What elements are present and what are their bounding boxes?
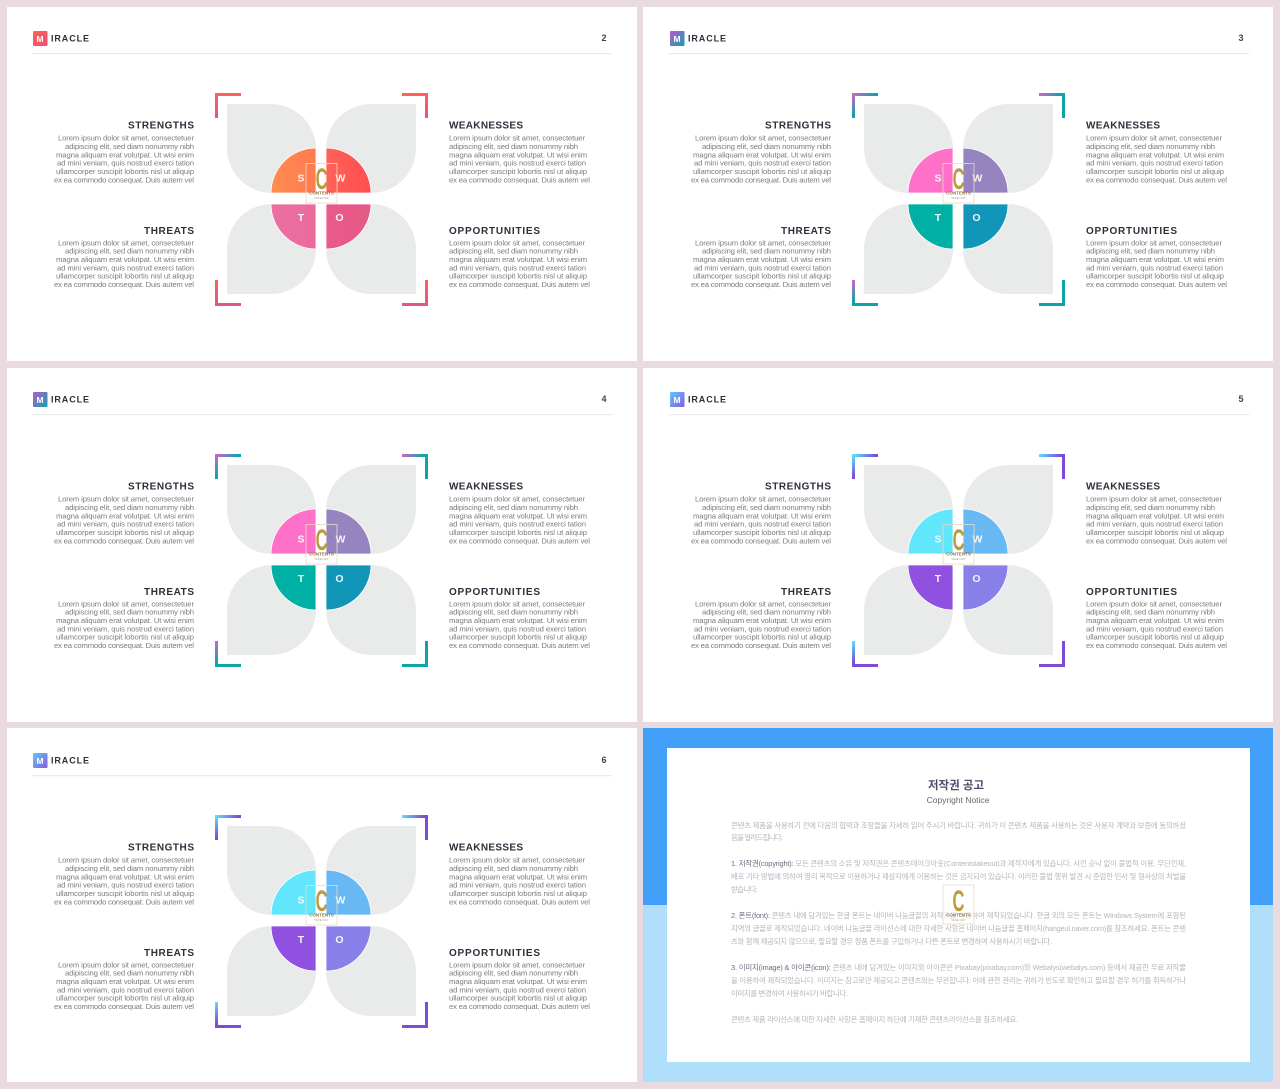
text block: opportunities: ullamcorper suscipit lobortis nisl ut aliquip [449, 994, 587, 1003]
text block: weaknesses: ullamcorper suscipit lobortis nisl ut aliquip [449, 889, 587, 898]
text block: threats: ullamcorper suscipit lobortis nisl ut aliquip [56, 994, 194, 1003]
text block: opportunities: ex ea commodo consequat. Duis autem vel [1086, 641, 1227, 650]
text block: strengths: ex ea commodo consequat. Duis autem vel [54, 175, 194, 184]
text block: weaknesses: WEAKNESSES [1086, 482, 1160, 492]
text block: strengths: magna aliquam erat volutpat. Ut wisi enim [693, 511, 831, 520]
text block: weaknesses: ex ea commodo consequat. Duis autem vel [449, 175, 590, 184]
text block: weaknesses: Lorem ipsum dolor sit amet, consectetuer [449, 494, 585, 504]
text block: weaknesses: magna aliquam erat volutpat. Ut wisi enim [449, 872, 587, 881]
text block: threats: ad mini veniam, quis nostrud exerci tation [694, 263, 831, 272]
logo: miracle [33, 753, 89, 768]
text block: weaknesses: magna aliquam erat volutpat. Ut wisi enim [449, 150, 587, 159]
text block: strengths: Lorem ipsum dolor sit amet, consectetuer [695, 134, 831, 142]
logo: miracle: IRACLE [688, 34, 726, 44]
logo: miracle: M [36, 395, 44, 405]
text block: opportunities: Lorem ipsum dolor sit amet, consectetuer [1086, 599, 1222, 608]
logo: miracle [33, 31, 89, 46]
text block: strengths: ad mini veniam, quis nostrud exerci tation [57, 159, 194, 168]
text block: weaknesses [449, 120, 590, 184]
text block: opportunities: magna aliquam erat volutpat. Ut wisi enim [1086, 255, 1224, 264]
text block: threats: Lorem ipsum dolor sit amet, consectetuer [58, 599, 194, 608]
text block: opportunities: adipiscing elit, sed diam nonummy nibh [449, 969, 578, 978]
diagram: swot flower: S [297, 894, 305, 906]
text block: opportunities: Lorem ipsum dolor sit amet, consectetuer [449, 960, 585, 969]
diagram: swot flower: O [972, 212, 981, 224]
logo: miracle: IRACLE [51, 756, 89, 766]
text block: threats: THREATS [144, 587, 194, 598]
text block: strengths: ullamcorper suscipit lobortis nisl ut aliquip [56, 167, 194, 176]
text block: threats: adipiscing elit, sed diam nonummy nibh [65, 969, 194, 978]
text block: opportunities: ad mini veniam, quis nostrud exerci tation [449, 624, 586, 633]
text block: weaknesses [1086, 482, 1227, 545]
heading: copyright title: 저작권 공고 [928, 778, 984, 792]
text block: opportunities: ullamcorper suscipit lobortis nisl ut aliquip [449, 272, 587, 281]
text block: threats: adipiscing elit, sed diam nonummy nibh [65, 247, 194, 256]
text block: strengths: adipiscing elit, sed diam nonummy nibh [65, 142, 194, 151]
text block: clause 2 font: 지역의 글꼴로 제작되었습니다. 네이버 나눔글꼴 라이선스에 대한 자세한 사항은 네이버 나눔글꼴 홈페이지(hangeul.naver.com)를 참조하세요. 폰트는 콘텐 [731, 924, 1186, 933]
text block: closing note: 콘텐츠 제품 라이선스에 대한 자세한 사항은 홈페이지 하단에 기재한 콘텐츠라이선스를 참조하세요. [731, 1015, 1018, 1024]
text block: strengths: magna aliquam erat volutpat. Ut wisi enim [56, 150, 194, 159]
text block: opportunities: Lorem ipsum dolor sit amet, consectetuer [449, 238, 585, 247]
logo: miracle [670, 392, 726, 407]
logo: miracle: IRACLE [51, 34, 89, 44]
text block: threats: ex ea commodo consequat. Duis autem vel [691, 641, 831, 650]
diagram: swot flower: S [297, 172, 305, 184]
text block: threats: ad mini veniam, quis nostrud exerci tation [57, 263, 194, 272]
diagram: swot flower: S [297, 534, 305, 546]
text block: weaknesses: magna aliquam erat volutpat. Ut wisi enim [1086, 511, 1224, 520]
text block: opportunities: ullamcorper suscipit lobortis nisl ut aliquip [449, 633, 587, 642]
text block: strengths: ullamcorper suscipit lobortis nisl ut aliquip [56, 528, 194, 537]
text block: weaknesses: Lorem ipsum dolor sit amet, consectetuer [1086, 494, 1222, 504]
page number: 3 [1238, 33, 1244, 43]
watermark: CONTENTS [309, 552, 334, 556]
watermark: TAKE OUT [951, 918, 966, 922]
text block: strengths: ex ea commodo consequat. Duis autem vel [54, 897, 194, 906]
text block: clause 2 font: 2. 폰트(font): 콘텐츠 내에 담겨있는 한글 폰트는 네이버 나눔글꼴의 저작권을 이용하여 제작되었습니다. 한글 외의 모든 폰트는 Windows System에 포함된 [731, 911, 1186, 920]
logo: miracle: IRACLE [51, 394, 89, 404]
page number: 4 [601, 394, 607, 404]
text block: clause 3 image and icon: 을 이용하여 제작되었습니다. 이미지는 참고로만 제공되고 콘텐츠와는 무관합니다. 이에 관한 관리는 귀하가 빈도로 확인하고 필요할 경우 허가를 취득하거나 [731, 976, 1186, 985]
panel: copyright notice [643, 728, 1273, 1082]
text block: threats: THREATS [781, 587, 831, 598]
text block: threats: ad mini veniam, quis nostrud exerci tation [57, 624, 194, 633]
heading: copyright title [927, 778, 990, 805]
text block: opportunities [1086, 587, 1227, 650]
text block: strengths: ex ea commodo consequat. Duis autem vel [54, 536, 194, 545]
text block: clause 1 copyright: 배포 기타 방법에 의하여 영리 목적으로 이용하거나 제삼자에게 이용하는 것은 금지되어 있습니다. 이러한 불법 행위 발견 시 준엄한 민사 및 형사상의 처벌을 [731, 872, 1186, 881]
text block: threats: magna aliquam erat volutpat. Ut wisi enim [693, 255, 831, 264]
text block: threats: magna aliquam erat volutpat. Ut wisi enim [56, 977, 194, 986]
text block: threats: ullamcorper suscipit lobortis nisl ut aliquip [56, 272, 194, 281]
text block: strengths: magna aliquam erat volutpat. Ut wisi enim [56, 511, 194, 520]
text block: strengths: adipiscing elit, sed diam nonummy nibh [702, 503, 831, 512]
text block: opportunities: magna aliquam erat volutpat. Ut wisi enim [449, 255, 587, 264]
text block: opportunities: magna aliquam erat volutpat. Ut wisi enim [449, 616, 587, 625]
text block: strengths: STRENGTHS [128, 842, 194, 854]
diagram: swot flower: T [935, 573, 942, 585]
text block: threats: THREATS [144, 948, 194, 959]
text block: weaknesses: ad mini veniam, quis nostrud exerci tation [449, 159, 586, 168]
text block: threats: ex ea commodo consequat. Duis autem vel [54, 1002, 194, 1011]
text block: strengths: ad mini veniam, quis nostrud exerci tation [57, 881, 194, 890]
text block: opportunities: ex ea commodo consequat. Duis autem vel [449, 280, 590, 289]
diagram: swot flower: T [298, 212, 305, 224]
text block: weaknesses: ullamcorper suscipit lobortis nisl ut aliquip [1086, 528, 1224, 537]
text block: strengths: ex ea commodo consequat. Duis autem vel [691, 536, 831, 545]
text block: strengths: STRENGTHS [765, 482, 831, 492]
page number: 6 [601, 755, 607, 765]
watermark [943, 885, 974, 924]
watermark: C [316, 524, 327, 557]
text block: strengths: STRENGTHS [128, 120, 194, 132]
diagram: swot flower [216, 94, 426, 304]
watermark [943, 163, 974, 203]
diagram: swot flower: O [335, 573, 344, 585]
text block: strengths: ad mini veniam, quis nostrud exerci tation [57, 520, 194, 529]
diagram: swot flower: W [973, 534, 983, 546]
text block: weaknesses: Lorem ipsum dolor sit amet, consectetuer [449, 856, 585, 864]
text block: weaknesses: ad mini veniam, quis nostrud exerci tation [449, 520, 586, 529]
panel: slide 2 red theme [7, 7, 637, 361]
text block: threats: THREATS [781, 226, 831, 237]
text block: threats [54, 587, 194, 650]
text block: threats: ad mini veniam, quis nostrud exerci tation [57, 985, 194, 994]
text block: weaknesses [449, 482, 590, 545]
text block: weaknesses: adipiscing elit, sed diam nonummy nibh [449, 864, 578, 873]
logo: miracle: M [36, 756, 44, 766]
logo: miracle: M [36, 34, 44, 44]
text block: threats [691, 587, 831, 650]
diagram: swot flower: T [935, 212, 942, 224]
watermark: CONTENTS [946, 912, 971, 918]
text block: weaknesses: Lorem ipsum dolor sit amet, consectetuer [449, 134, 585, 142]
watermark: CONTENTS [946, 190, 971, 196]
text block: strengths: magna aliquam erat volutpat. Ut wisi enim [693, 150, 831, 159]
text block: opportunities: ad mini veniam, quis nostrud exerci tation [449, 263, 586, 272]
text block: strengths: Lorem ipsum dolor sit amet, consectetuer [58, 494, 194, 504]
text block: weaknesses: WEAKNESSES [1086, 120, 1160, 132]
watermark: C [953, 885, 964, 918]
text block: threats: magna aliquam erat volutpat. Ut wisi enim [56, 255, 194, 264]
text block: threats: ullamcorper suscipit lobortis nisl ut aliquip [56, 633, 194, 642]
text block: strengths [691, 120, 831, 184]
text block: strengths: adipiscing elit, sed diam nonummy nibh [702, 142, 831, 151]
text block: threats: ad mini veniam, quis nostrud exerci tation [694, 624, 831, 633]
text block: opportunities: OPPORTUNITIES [449, 226, 540, 237]
watermark: TAKE OUT [951, 557, 966, 561]
text block: weaknesses: magna aliquam erat volutpat. Ut wisi enim [1086, 150, 1224, 159]
logo: miracle [670, 31, 726, 46]
text block: weaknesses: ullamcorper suscipit lobortis nisl ut aliquip [449, 528, 587, 537]
text block: strengths: ullamcorper suscipit lobortis nisl ut aliquip [56, 889, 194, 898]
text block: strengths: STRENGTHS [765, 120, 831, 132]
text block: opportunities: ad mini veniam, quis nostrud exerci tation [449, 985, 586, 994]
text block: weaknesses: WEAKNESSES [449, 482, 523, 492]
watermark: TAKE OUT [314, 196, 329, 200]
text block: weaknesses: WEAKNESSES [449, 120, 523, 132]
text block: threats: adipiscing elit, sed diam nonummy nibh [65, 608, 194, 617]
text block: weaknesses: ex ea commodo consequat. Duis autem vel [1086, 536, 1227, 545]
text block: clause 1 copyright: 1. 저작권(copyright): 모든 콘텐츠의 소유 및 저작권은 콘텐츠테이크아웃(Contentstakeout)과 제작자에게 있습니다. 사전 승낙 없이 불법적 이용, 무단전재, [731, 859, 1186, 868]
watermark [306, 524, 337, 564]
text block: weaknesses: WEAKNESSES [449, 842, 523, 854]
diagram: swot flower: W [336, 894, 346, 906]
text block: weaknesses: ad mini veniam, quis nostrud exerci tation [1086, 159, 1223, 168]
watermark: C [316, 885, 327, 918]
text block: clause 1 copyright: 받습니다. [731, 885, 758, 894]
watermark: C [953, 163, 964, 196]
text block: opportunities: Lorem ipsum dolor sit amet, consectetuer [449, 599, 585, 608]
text block: weaknesses [449, 842, 590, 906]
text block: strengths: Lorem ipsum dolor sit amet, consectetuer [695, 494, 831, 504]
watermark: C [316, 163, 327, 196]
text block: threats: ullamcorper suscipit lobortis nisl ut aliquip [693, 633, 831, 642]
text block: weaknesses: ullamcorper suscipit lobortis nisl ut aliquip [449, 167, 587, 176]
text block: weaknesses: ad mini veniam, quis nostrud exerci tation [449, 881, 586, 890]
text block: threats: THREATS [144, 226, 194, 237]
text block: weaknesses: ex ea commodo consequat. Duis autem vel [449, 536, 590, 545]
text block: threats: magna aliquam erat volutpat. Ut wisi enim [56, 616, 194, 625]
text block: opportunities: OPPORTUNITIES [449, 948, 540, 959]
text block: opportunities: ad mini veniam, quis nostrud exerci tation [1086, 624, 1223, 633]
watermark: CONTENTS [309, 190, 334, 196]
text block: weaknesses: Lorem ipsum dolor sit amet, consectetuer [1086, 134, 1222, 142]
text block: threats [54, 226, 194, 289]
diagram: swot flower: O [335, 934, 344, 946]
text block: opportunities [1086, 226, 1227, 289]
diagram: swot flower: W [973, 172, 983, 184]
text block: threats: ex ea commodo consequat. Duis autem vel [691, 280, 831, 289]
panel: slide 4 pink teal theme [7, 368, 637, 722]
text block: strengths [691, 482, 831, 545]
text block: threats [691, 226, 831, 289]
text block: opportunities: ullamcorper suscipit lobortis nisl ut aliquip [1086, 633, 1224, 642]
logo: miracle: M [673, 34, 681, 44]
watermark [306, 163, 337, 203]
text block: opportunities [449, 587, 590, 650]
text block: strengths [54, 842, 194, 906]
text block: threats [54, 948, 194, 1011]
text block: strengths: ullamcorper suscipit lobortis nisl ut aliquip [693, 167, 831, 176]
text block: opportunities: OPPORTUNITIES [1086, 587, 1177, 598]
text block: weaknesses: ullamcorper suscipit lobortis nisl ut aliquip [1086, 167, 1224, 176]
text block: opportunities: ullamcorper suscipit lobortis nisl ut aliquip [1086, 272, 1224, 281]
text block: threats: Lorem ipsum dolor sit amet, consectetuer [58, 238, 194, 247]
text block: weaknesses: magna aliquam erat volutpat. Ut wisi enim [449, 511, 587, 520]
text block: threats: ullamcorper suscipit lobortis nisl ut aliquip [693, 272, 831, 281]
watermark: CONTENTS [309, 912, 334, 918]
text block: opportunities: ex ea commodo consequat. Duis autem vel [1086, 280, 1227, 289]
diagram: swot flower: T [298, 934, 305, 946]
text block: threats: Lorem ipsum dolor sit amet, consectetuer [58, 960, 194, 969]
watermark: TAKE OUT [951, 196, 966, 200]
text block: clause 2 font: 츠와 함께 제공되지 않으므로, 필요할 경우 정품 폰트를 구입하거나 다른 폰트로 변경하여 사용하시기 바랍니다. [731, 937, 1052, 946]
text block: strengths: adipiscing elit, sed diam nonummy nibh [65, 864, 194, 873]
diagram: swot flower [854, 94, 1064, 304]
text block: weaknesses: adipiscing elit, sed diam nonummy nibh [1086, 503, 1215, 512]
diagram: swot flower: T [298, 573, 305, 585]
text block: clause 2 font [731, 911, 1186, 946]
diagram: swot flower: S [934, 534, 942, 546]
text block: opportunities: OPPORTUNITIES [449, 587, 540, 598]
page number: 5 [1238, 394, 1244, 404]
logo: miracle: M [673, 395, 681, 405]
text block: strengths: ex ea commodo consequat. Duis autem vel [691, 175, 831, 184]
text block: opportunities: OPPORTUNITIES [1086, 226, 1177, 237]
text block: strengths: magna aliquam erat volutpat. Ut wisi enim [56, 872, 194, 881]
heading: copyright title: Copyright Notice [927, 795, 990, 805]
text block: threats: ex ea commodo consequat. Duis autem vel [54, 641, 194, 650]
text block: intro: 콘텐츠 제품을 사용하기 전에 다음의 협약과 조항들을 자세히 읽어 주시기 바랍니다. 귀하가 이 콘텐츠 제품을 사용하는 것은 사용자 계약과 보증에 동의하셨 [731, 821, 1186, 830]
watermark: TAKE OUT [314, 557, 329, 561]
diagram: swot flower [854, 456, 1064, 666]
diagram: swot flower: O [972, 573, 981, 585]
text block: weaknesses: adipiscing elit, sed diam nonummy nibh [449, 503, 578, 512]
text block: weaknesses: adipiscing elit, sed diam nonummy nibh [1086, 142, 1215, 151]
text block: strengths: Lorem ipsum dolor sit amet, consectetuer [58, 134, 194, 142]
text block: threats: magna aliquam erat volutpat. Ut wisi enim [693, 616, 831, 625]
text block: clause 1 copyright [731, 859, 1186, 894]
diagram: swot flower: S [934, 172, 942, 184]
logo: miracle: IRACLE [688, 394, 726, 404]
text block: strengths: STRENGTHS [128, 482, 194, 492]
panel: slide 3 pink teal theme [643, 7, 1273, 361]
text block: opportunities: magna aliquam erat volutpat. Ut wisi enim [449, 977, 587, 986]
diagram: swot flower: W [336, 534, 346, 546]
text block: threats: adipiscing elit, sed diam nonummy nibh [702, 608, 831, 617]
text block: opportunities: Lorem ipsum dolor sit amet, consectetuer [1086, 238, 1222, 247]
text block: opportunities: ad mini veniam, quis nostrud exerci tation [1086, 263, 1223, 272]
text block: intro [731, 821, 1186, 842]
diagram: swot flower: O [335, 212, 344, 224]
text block: strengths: ullamcorper suscipit lobortis nisl ut aliquip [693, 528, 831, 537]
text block: threats: Lorem ipsum dolor sit amet, consectetuer [695, 599, 831, 608]
watermark [306, 885, 337, 925]
text block: strengths [54, 482, 194, 545]
text block: strengths: Lorem ipsum dolor sit amet, consectetuer [58, 856, 194, 864]
text block: opportunities: adipiscing elit, sed diam nonummy nibh [449, 247, 578, 256]
text block: opportunities: ex ea commodo consequat. Duis autem vel [449, 1002, 590, 1011]
text block: opportunities: adipiscing elit, sed diam nonummy nibh [1086, 608, 1215, 617]
text block: weaknesses: ad mini veniam, quis nostrud exerci tation [1086, 520, 1223, 529]
text block: clause 3 image and icon [731, 963, 1186, 998]
text block: threats: adipiscing elit, sed diam nonummy nibh [702, 247, 831, 256]
logo: miracle [33, 392, 89, 407]
text block: opportunities: ex ea commodo consequat. Duis autem vel [449, 641, 590, 650]
panel: slide 6 blue purple theme [7, 728, 637, 1082]
text block: intro: 음을 알려드립니다. [731, 833, 783, 842]
text block: opportunities [449, 226, 590, 289]
panel: slide 5 blue purple theme [643, 368, 1273, 722]
text block: threats: ex ea commodo consequat. Duis autem vel [54, 280, 194, 289]
watermark: CONTENTS [946, 552, 971, 556]
diagram: swot flower: W [336, 172, 346, 184]
text block: opportunities: adipiscing elit, sed diam nonummy nibh [1086, 247, 1215, 256]
text block: clause 3 image and icon: 3. 이미지(image) & 아이콘(icon): 콘텐츠 내에 담겨있는 이미지와 아이콘은 Pixabay(pixabay.com)와 Webalys(webalys.com) 등에서 제공한 무료 저작물 [731, 963, 1186, 972]
text block: strengths [54, 120, 194, 184]
diagram: swot flower [216, 816, 426, 1026]
text block: opportunities: magna aliquam erat volutpat. Ut wisi enim [1086, 616, 1224, 625]
text block: opportunities [449, 948, 590, 1011]
text block: weaknesses: ex ea commodo consequat. Duis autem vel [1086, 175, 1227, 184]
text block: strengths: ad mini veniam, quis nostrud exerci tation [694, 520, 831, 529]
text block: threats: Lorem ipsum dolor sit amet, consectetuer [695, 238, 831, 247]
text block: strengths: ad mini veniam, quis nostrud exerci tation [694, 159, 831, 168]
watermark [943, 524, 974, 564]
watermark: TAKE OUT [314, 918, 329, 922]
text block: weaknesses: adipiscing elit, sed diam nonummy nibh [449, 142, 578, 151]
text block: clause 3 image and icon: 이미지를 변경하여 사용하시기 바랍니다. [731, 989, 848, 998]
diagram: swot flower [216, 456, 426, 666]
text block: weaknesses: ex ea commodo consequat. Duis autem vel [449, 897, 590, 906]
text block: weaknesses [1086, 120, 1227, 184]
watermark: C [953, 524, 964, 557]
text block: strengths: adipiscing elit, sed diam nonummy nibh [65, 503, 194, 512]
page number: 2 [601, 33, 607, 43]
text block: opportunities: adipiscing elit, sed diam nonummy nibh [449, 608, 578, 617]
